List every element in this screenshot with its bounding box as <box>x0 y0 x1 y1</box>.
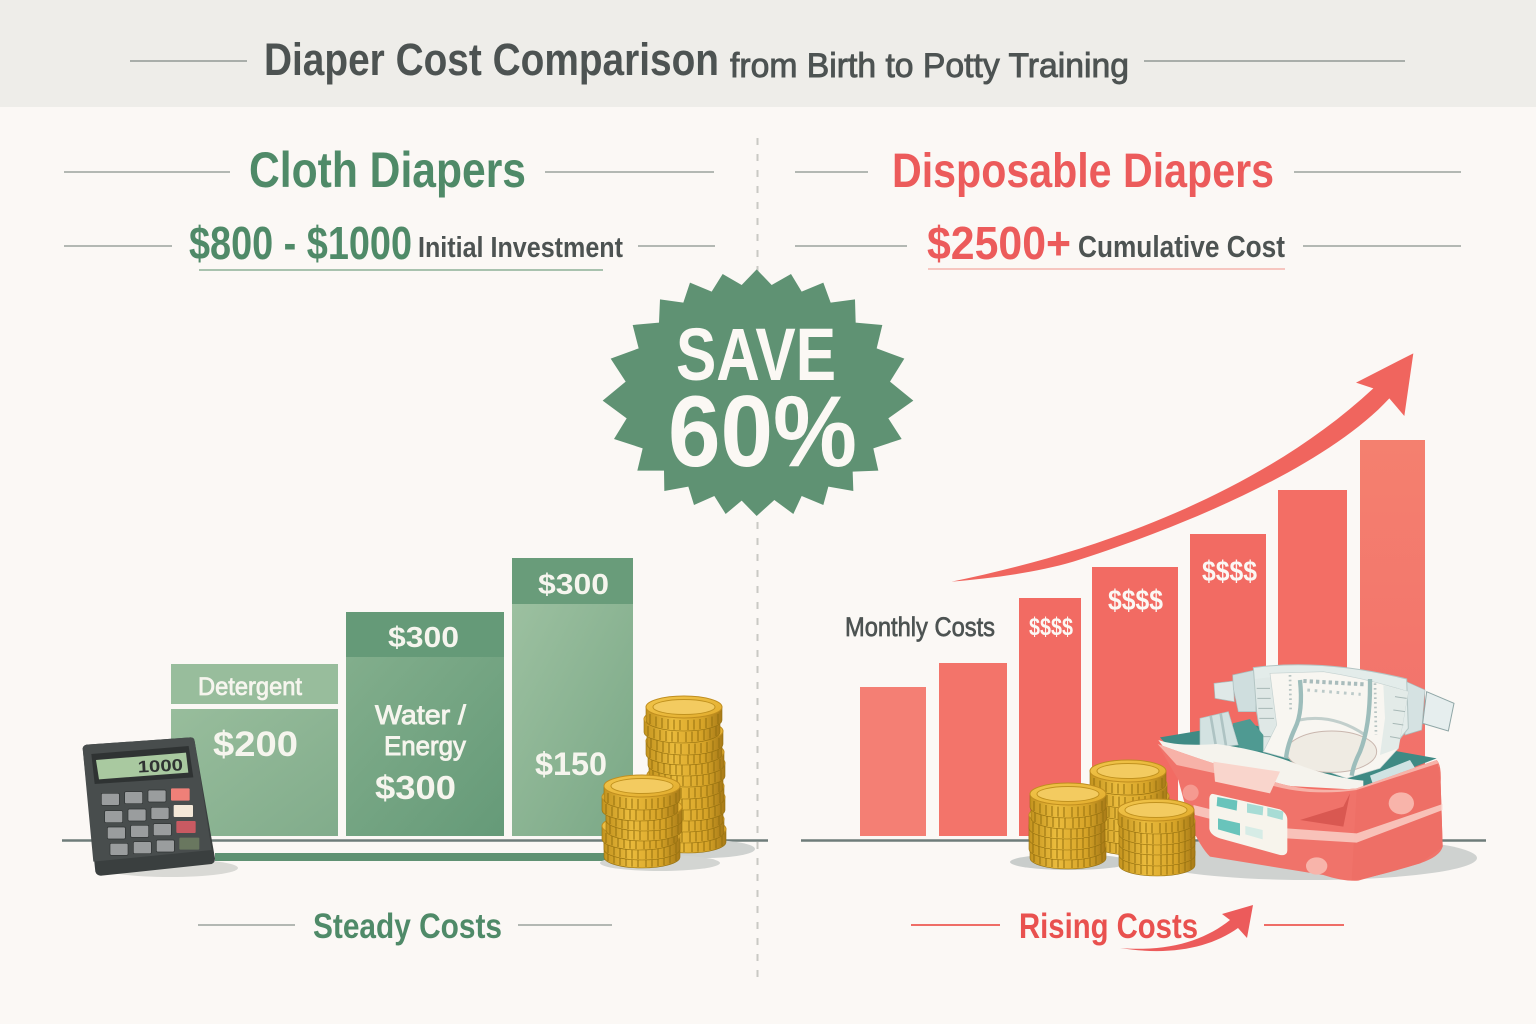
bar chart: disposable monthly costs: $$$$ <box>1202 556 1257 588</box>
icon: coin stacks right <box>1010 760 1195 876</box>
title: from Birth to Potty Training <box>730 47 1129 85</box>
bar: water and energy: Energy <box>384 731 466 761</box>
disposable cost summary <box>795 217 1461 269</box>
bag body <box>1158 740 1443 881</box>
header band <box>0 0 1536 107</box>
bar chart: cloth steady costs <box>171 558 633 836</box>
disposable cost summary: $2500+ <box>927 217 1071 269</box>
bar: third period <box>512 558 633 836</box>
wipes <box>1200 712 1238 748</box>
bar: detergent <box>171 664 338 836</box>
bar: water and energy: $300 <box>388 622 459 654</box>
bar: water and energy <box>346 612 504 836</box>
bar: third period: $150 <box>535 746 607 782</box>
bar: detergent: Detergent <box>198 673 302 701</box>
icon: coin stacks left <box>600 696 755 871</box>
caption: rising costs <box>911 905 1344 951</box>
cloth cost summary <box>64 217 715 270</box>
cloth cost summary: Initial Investment <box>418 232 623 264</box>
badge: save 60%: 60% <box>668 376 857 488</box>
arrow: rising trend <box>952 353 1413 582</box>
steady cost line <box>215 853 610 861</box>
baseline left <box>62 839 768 842</box>
package label <box>1209 794 1287 855</box>
bar chart: disposable monthly costs: $$$$ <box>1108 585 1163 617</box>
chart label: monthly costs: Monthly Costs <box>845 612 995 642</box>
badge: save 60%: SAVE <box>676 313 836 396</box>
icon: calculator <box>83 737 238 877</box>
divider <box>756 138 758 985</box>
icon: calculator: 1000 <box>137 755 183 777</box>
bar: detergent: $200 <box>213 725 298 764</box>
bar chart: disposable monthly costs: $$$$ <box>1029 613 1073 641</box>
package shadow <box>1143 836 1477 880</box>
package interior <box>1160 723 1437 787</box>
bar: water and energy: $300 <box>375 769 456 806</box>
bar chart: disposable monthly costs <box>860 440 1425 836</box>
caption: rising costs: Rising Costs <box>1019 907 1198 946</box>
panel heading: cloth diapers: Cloth Diapers <box>249 142 526 198</box>
title <box>264 34 1129 85</box>
cloth cost summary: $800 - $1000 <box>189 217 412 269</box>
diaper <box>1200 665 1454 786</box>
badge: save 60% <box>603 269 913 516</box>
caption: steady costs: Steady Costs <box>313 907 502 946</box>
baseline right <box>801 839 1486 842</box>
bar: third period: $300 <box>538 569 609 601</box>
bar: water and energy: Water / <box>375 700 467 730</box>
illustration: diaper package <box>1143 665 1477 881</box>
title: Diaper Cost Comparison <box>264 34 719 85</box>
disposable cost summary: Cumulative Cost <box>1078 229 1285 264</box>
panel heading: disposable diapers: Disposable Diapers <box>892 145 1274 198</box>
